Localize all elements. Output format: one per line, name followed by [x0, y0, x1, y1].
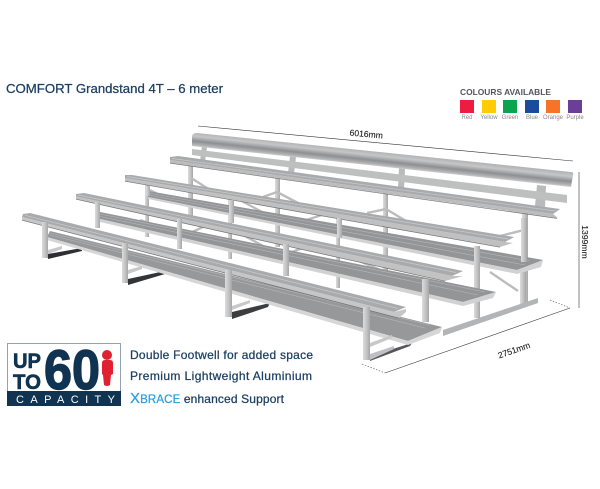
feature list — [130, 348, 313, 407]
capacity badge — [7, 338, 121, 406]
title: COMFORT Grandstand 4T – 6 meter — [6, 82, 223, 96]
third row posts — [95, 202, 429, 322]
icon: person — [102, 350, 113, 386]
rear posts — [145, 160, 528, 304]
dimension: height 1399mm — [579, 172, 590, 308]
floor rails and feet — [48, 248, 538, 361]
lower back rail — [192, 149, 567, 203]
swatch: red: Red — [461, 115, 473, 121]
swatch: purple: Purple — [566, 115, 584, 121]
feature: aluminium: Premium Lightweight Aluminium — [130, 369, 312, 383]
capacity band — [7, 391, 121, 406]
x-braces — [140, 178, 524, 291]
front footwell — [47, 231, 442, 345]
front posts and frames — [42, 222, 394, 360]
dimension: width 6016mm: 6016mm — [349, 128, 383, 140]
swatch: green: Green — [502, 115, 518, 121]
legend heading: COLOURS AVAILABLE — [460, 87, 551, 97]
grandstand illustration — [22, 133, 573, 361]
swatch: yellow: Yellow — [480, 115, 498, 121]
swatch: blue: Blue — [526, 115, 539, 121]
badge text: up to: UP — [13, 350, 41, 373]
third seat — [76, 193, 463, 281]
colours available legend — [460, 87, 584, 121]
back supports — [200, 146, 546, 207]
second row posts — [146, 186, 527, 318]
badge text: capacity: CAPACITY — [16, 394, 116, 406]
footwell 2 — [148, 191, 543, 274]
dimension: width 6016mm — [198, 126, 573, 161]
feature: footwell: Double Footwell for added space — [130, 348, 313, 362]
badge text: up to: TO — [13, 371, 41, 394]
badge number: 60 — [44, 338, 100, 401]
dimension: depth 2751mm — [362, 300, 570, 373]
dimension: depth 2751mm: 2751mm — [497, 340, 531, 360]
top back rail — [192, 133, 573, 187]
second seat — [125, 175, 514, 247]
front seat — [22, 213, 406, 318]
dimension: height 1399mm: 1399mm — [580, 225, 590, 259]
badge text: up to — [13, 350, 41, 394]
top seat — [170, 156, 560, 218]
feature: xbrace: XBRACE enhanced Support — [130, 390, 285, 407]
footwell 3 — [100, 212, 496, 306]
swatch: orange: Orange — [543, 115, 564, 121]
